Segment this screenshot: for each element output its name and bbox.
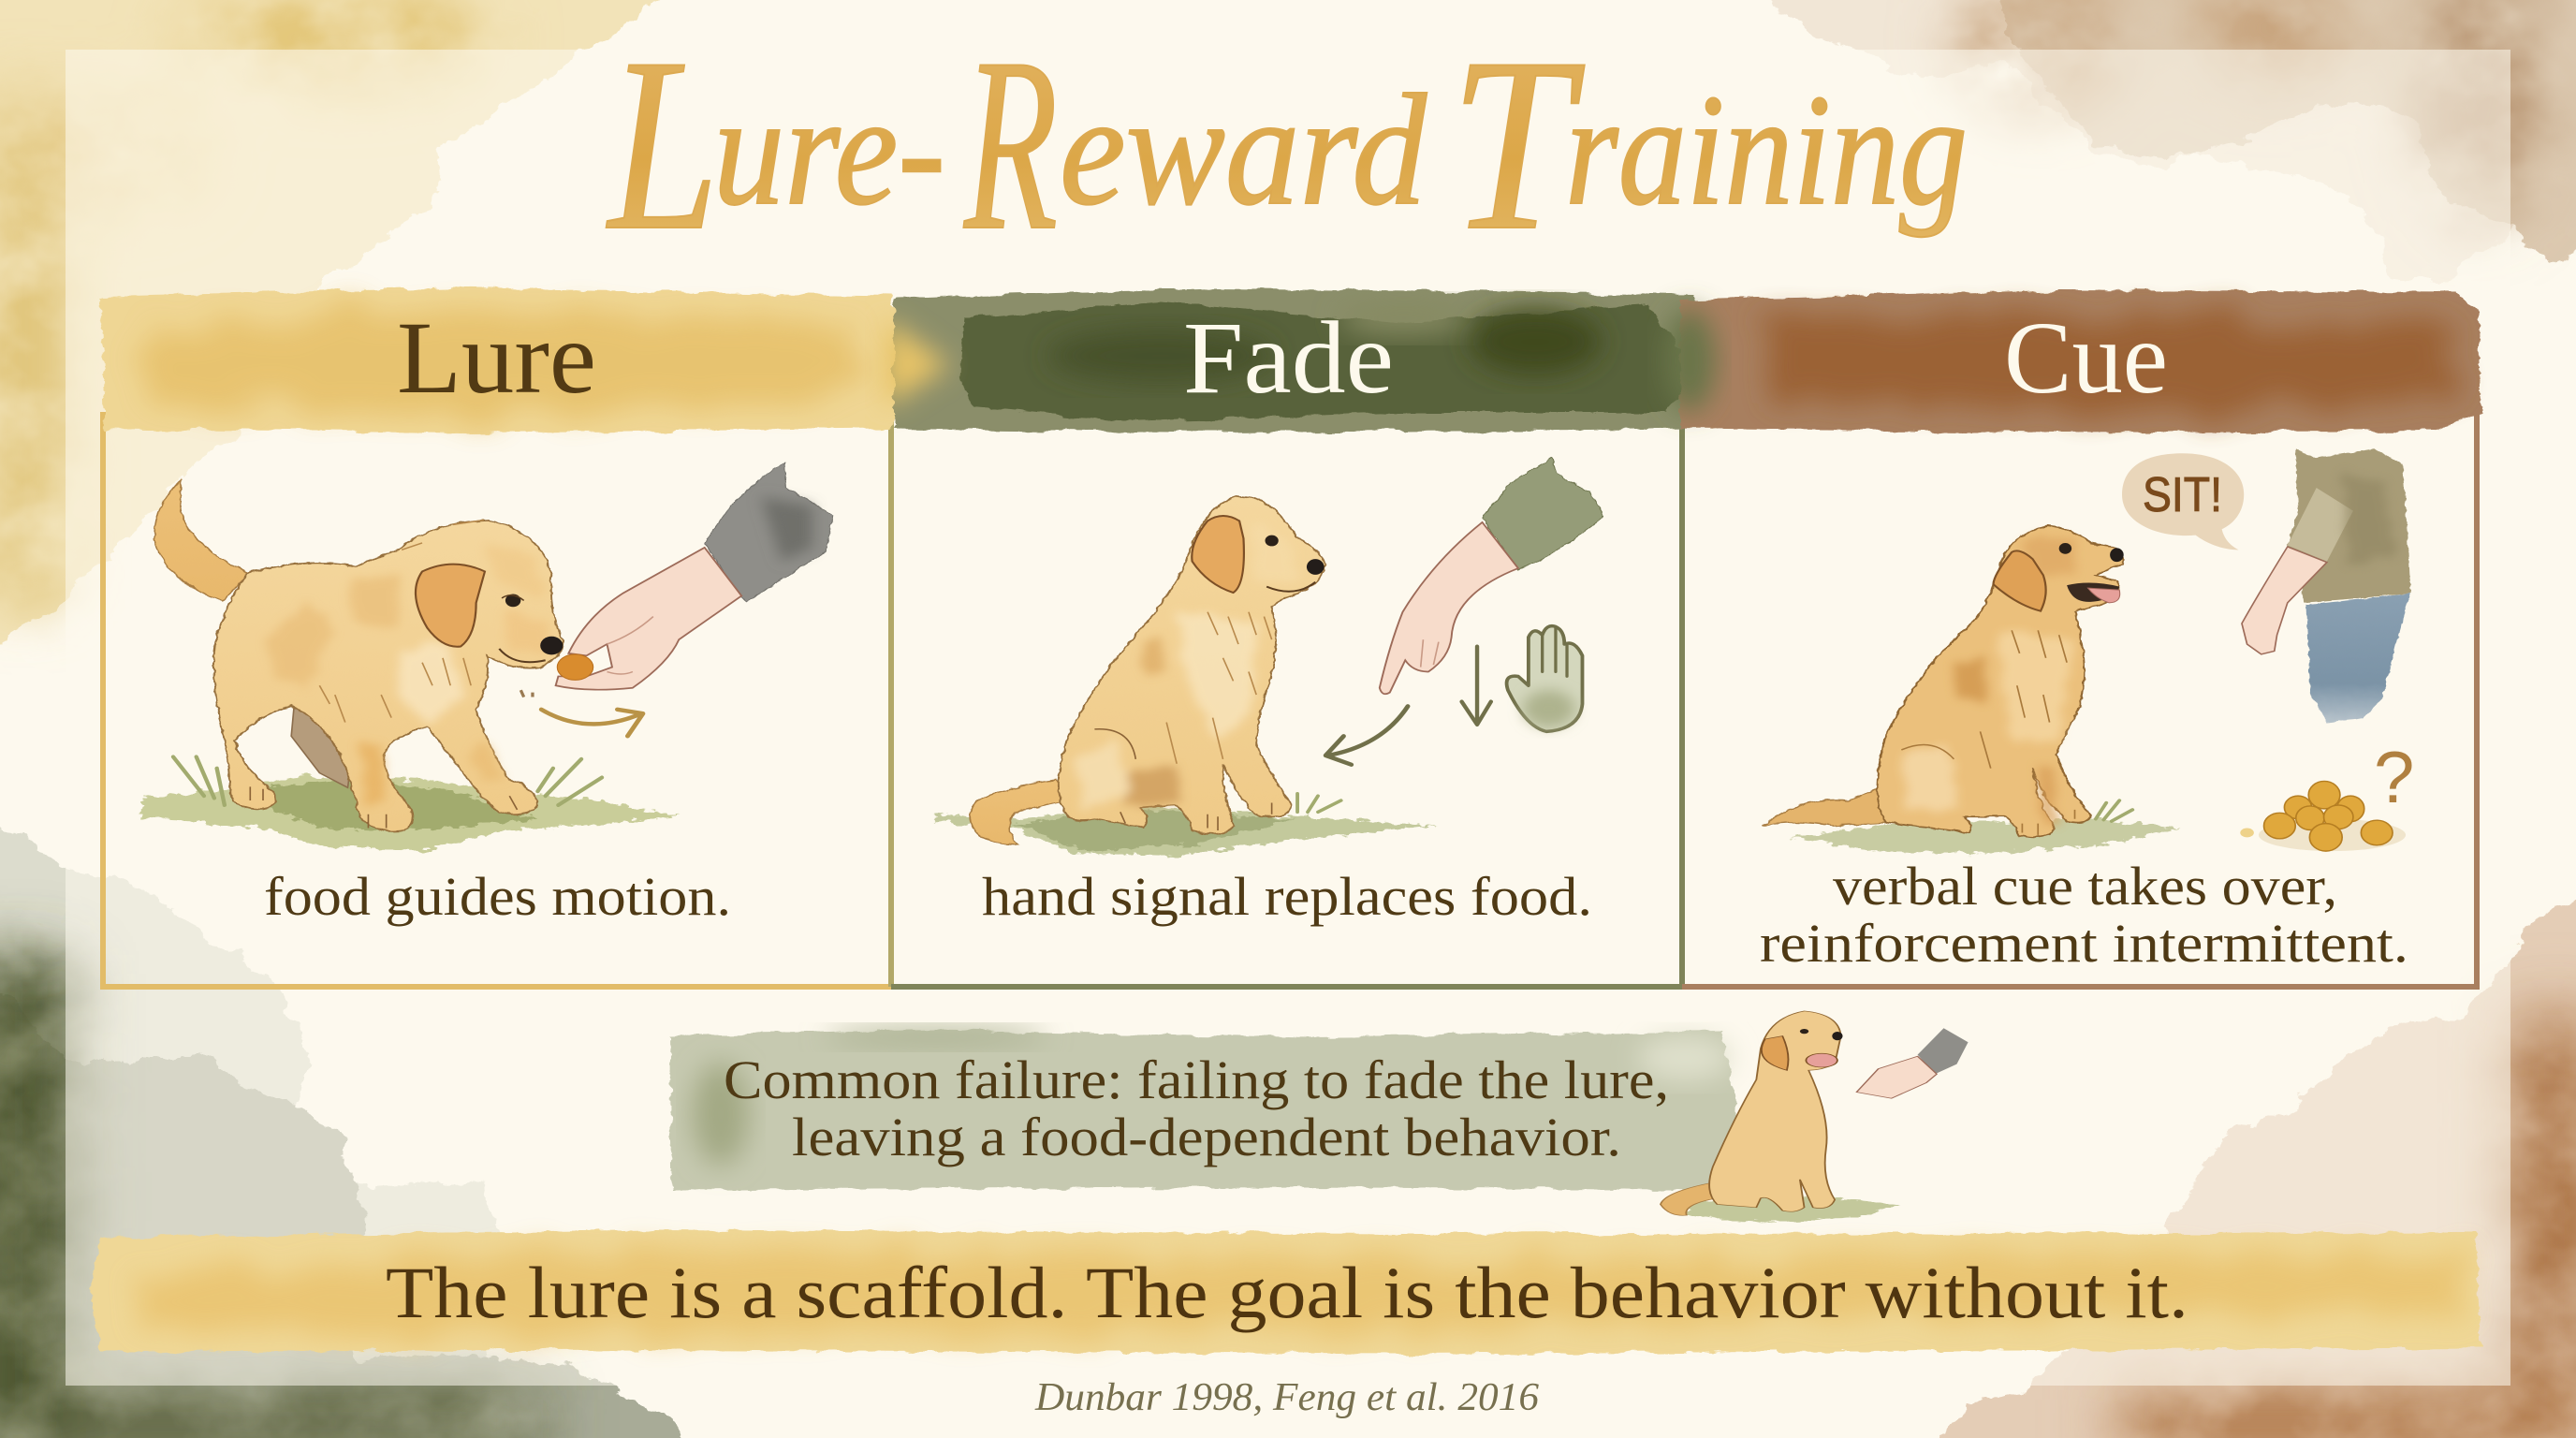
hand with treat xyxy=(556,548,741,690)
heading: Fade: Fade xyxy=(1183,301,1394,415)
treat xyxy=(557,654,593,680)
caption: lure: food guides motion. xyxy=(264,866,731,927)
header band: fade xyxy=(885,288,1699,433)
handler arm xyxy=(2242,547,2327,654)
small dog face xyxy=(1762,1029,1843,1070)
caption: cue: reinforcement intermittent. xyxy=(1760,913,2408,974)
panel: fade xyxy=(885,288,1699,927)
ear xyxy=(1192,516,1244,593)
eye, nose, mouth xyxy=(250,594,563,829)
header band: lure xyxy=(101,288,922,433)
caption: fade: hand signal replaces food. xyxy=(982,866,1592,927)
arrow: curved to dog xyxy=(1325,706,1408,765)
panel: cue xyxy=(1663,290,2481,974)
title: eward xyxy=(1060,62,1427,238)
callout: common failure: leaving a food-dependent behavior. xyxy=(792,1107,1621,1167)
takeaway banner xyxy=(90,1230,2481,1354)
body xyxy=(213,520,564,831)
citation: Dunbar 1998, Feng et al. 2016 xyxy=(1034,1376,1539,1419)
body xyxy=(1059,496,1325,834)
small hand xyxy=(1856,1028,1969,1098)
small ground xyxy=(1682,1192,1900,1223)
ground grass xyxy=(1791,819,2180,854)
title: L xyxy=(606,7,719,282)
sleeve xyxy=(1483,458,1604,570)
caption: cue: verbal cue takes over, xyxy=(1833,856,2337,917)
illustration: dog with empty hand xyxy=(1661,1011,1969,1223)
arrow: motion xyxy=(541,710,643,736)
illustration: puppy following treat xyxy=(139,462,833,851)
title: T xyxy=(1450,7,1587,282)
ground grass xyxy=(935,805,1436,856)
speech bubble xyxy=(2122,453,2244,550)
ear xyxy=(416,565,485,647)
pointing hand xyxy=(1380,522,1518,694)
handler sweater xyxy=(2288,448,2411,603)
title: raining xyxy=(1565,62,1968,238)
handler jeans xyxy=(2305,594,2410,723)
far rear leg xyxy=(291,709,350,787)
title: R xyxy=(961,7,1058,282)
callout: common failure xyxy=(669,1028,1736,1191)
illustration: attentive dog, handler and treats xyxy=(1763,448,2414,854)
panel frame: three columns xyxy=(103,412,2477,987)
ground grass xyxy=(139,775,681,851)
icon: open hand signal xyxy=(1507,626,1582,731)
speech text: SIT! xyxy=(2143,468,2222,522)
illustration: seated dog with hand signal xyxy=(935,458,1604,856)
small dog tail xyxy=(1661,1182,1717,1215)
fur strokes xyxy=(1166,612,1272,764)
crumbs xyxy=(520,690,533,697)
arrow: down xyxy=(1462,647,1491,725)
heading: Cue: Cue xyxy=(2004,301,2168,415)
tail xyxy=(970,780,1066,844)
eye, nose, mouth xyxy=(1094,536,1325,830)
takeaway text: The lure is a scaffold. The goal is the behavior without it. xyxy=(386,1252,2188,1333)
question mark: ? xyxy=(2374,736,2414,818)
seated dog xyxy=(1763,526,2124,837)
fur shading xyxy=(1074,520,1300,810)
header band: cue xyxy=(1663,290,2481,433)
panel: lure xyxy=(101,288,922,927)
small dog xyxy=(1709,1011,1841,1211)
fur shading xyxy=(268,543,550,810)
title: ure- xyxy=(713,62,945,238)
heading: Lure: Lure xyxy=(397,301,596,415)
sleeve xyxy=(705,462,833,602)
callout text: Common failure: failing to fade the lure, xyxy=(724,1049,1669,1110)
treats pile xyxy=(2240,781,2406,851)
fur strokes xyxy=(319,520,484,723)
caption: cue xyxy=(1760,856,2408,974)
tail xyxy=(154,478,250,601)
